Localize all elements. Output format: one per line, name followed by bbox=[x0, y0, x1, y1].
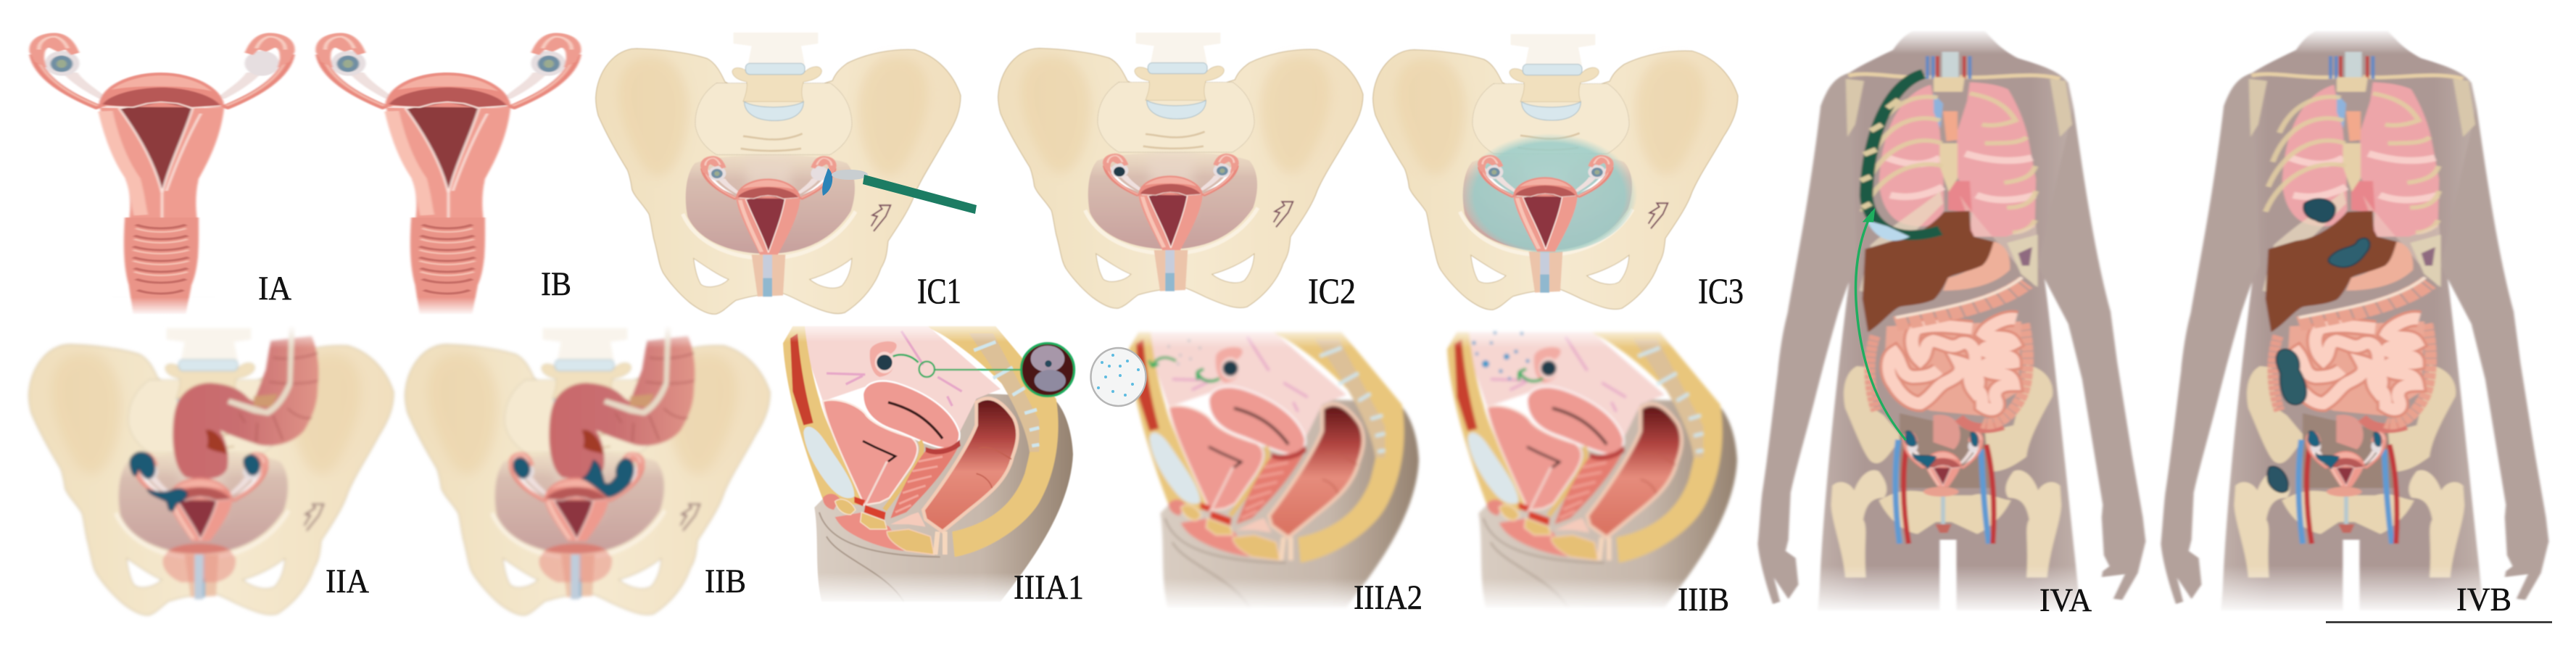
panel: stage IIB pelvis bbox=[405, 325, 770, 615]
label: IA: IA bbox=[258, 270, 291, 307]
icon: surgical instrument with spill bbox=[822, 168, 977, 214]
label: IVB: IVB bbox=[2456, 581, 2511, 618]
illustration: pelvis with malignant ascites bbox=[1373, 34, 1738, 310]
label: IIA: IIA bbox=[326, 563, 369, 600]
panel: stage IC3 pelvis bbox=[1373, 34, 1744, 311]
panel: stage IVA torso bbox=[1757, 28, 2145, 618]
panel: stage IA uterus bbox=[29, 33, 295, 315]
illustration: pelvis with colon and tumour on tube bbox=[29, 325, 394, 615]
illustration: female torso with distant metastases bbox=[2161, 28, 2548, 615]
label: IVA: IVA bbox=[2039, 582, 2092, 618]
illustration: pelvis with ruptured ovary bbox=[596, 33, 961, 314]
label: IB: IB bbox=[541, 265, 571, 303]
label: IIB: IIB bbox=[705, 563, 746, 600]
panel: stage IC2 pelvis bbox=[998, 33, 1363, 311]
panel: stage IC1 pelvis bbox=[596, 33, 977, 314]
panel: stage IVB torso bbox=[2161, 28, 2548, 618]
panel: stage IIIA2 sagittal section bbox=[1090, 325, 1426, 617]
panel: stage IIIB sagittal section bbox=[1445, 325, 1744, 618]
illustration: pelvis with colon and tumour near uterus bbox=[405, 325, 770, 615]
label: IIIA2: IIIA2 bbox=[1354, 579, 1422, 617]
illustration: uterus with one tumoured ovary bbox=[29, 33, 295, 315]
rule under IVB bbox=[2326, 621, 2552, 623]
illustration: uterus with both ovaries tumoured bbox=[315, 33, 581, 315]
panel: stage IB uterus bbox=[315, 33, 581, 315]
illustration: sagittal pelvic section bbox=[781, 319, 1080, 605]
illustration: pelvis with capsule rupture bbox=[998, 33, 1363, 308]
arrow: green spread to pleura bbox=[1856, 207, 1906, 440]
label: IIIB: IIIB bbox=[1678, 581, 1729, 618]
illustration: female torso with organs and pleural effusion bbox=[1757, 28, 2145, 615]
label: IC3: IC3 bbox=[1698, 270, 1744, 311]
panel: stage IIA pelvis bbox=[29, 325, 394, 615]
panel: stage IIIA1 sagittal section bbox=[781, 319, 1084, 607]
label: IC2: IC2 bbox=[1308, 270, 1356, 311]
label: IC1: IC1 bbox=[917, 270, 961, 311]
illustration: sagittal pelvic section with microscopic spread bbox=[1127, 325, 1426, 611]
illustration: sagittal pelvic section with macroscopic spread bbox=[1445, 325, 1744, 611]
label: IIIA1: IIIA1 bbox=[1014, 568, 1084, 607]
callout: magnified peritoneal circle with cells bbox=[1090, 348, 1146, 406]
